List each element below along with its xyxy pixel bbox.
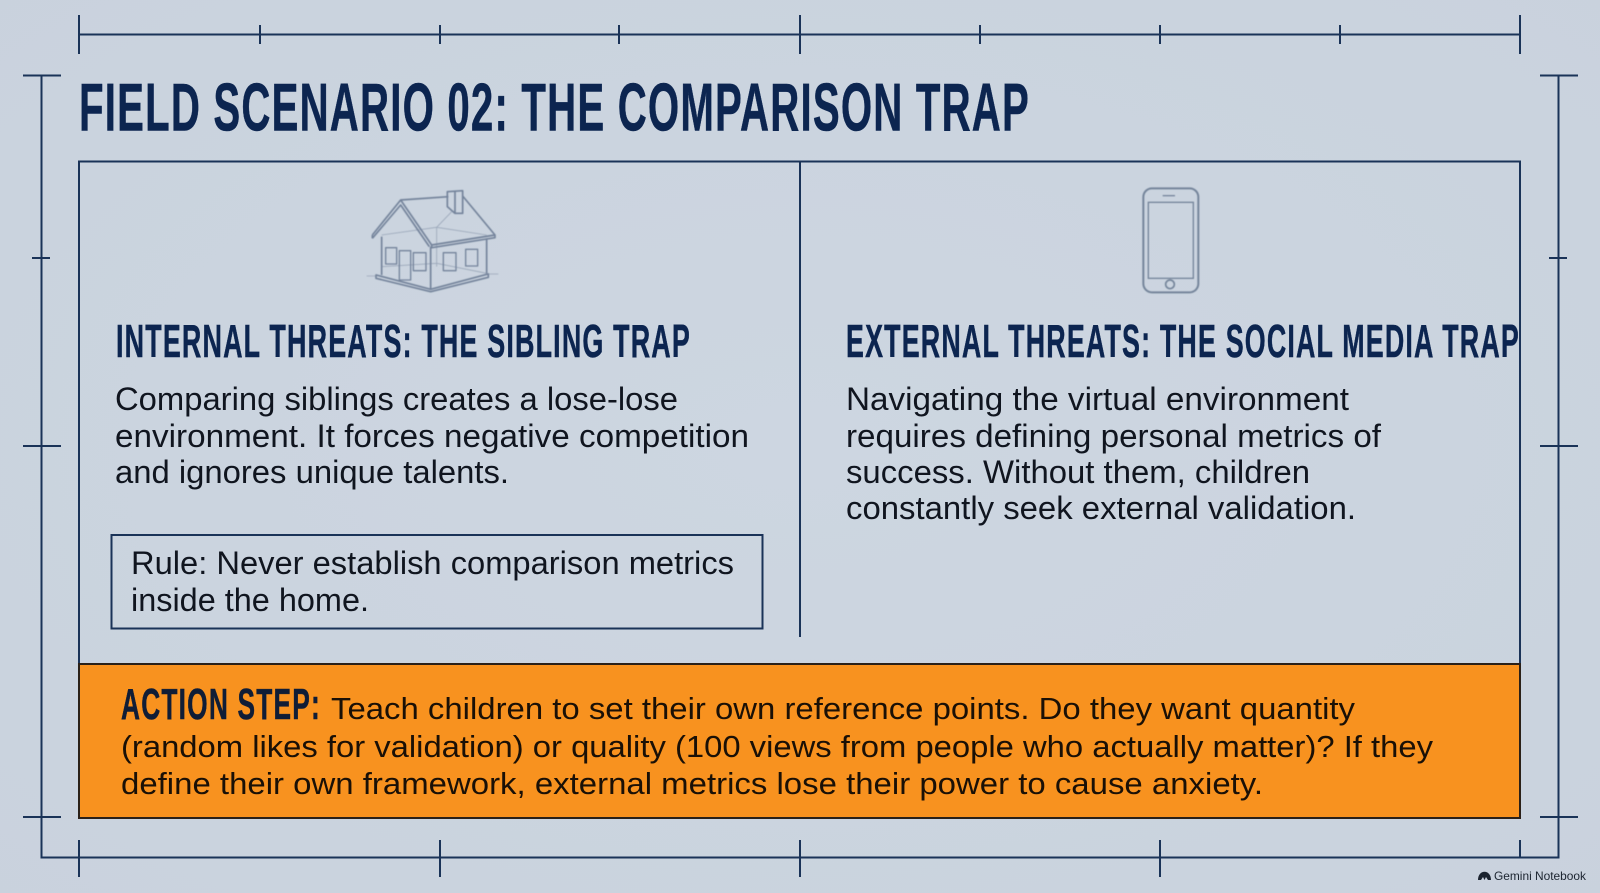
text: virtual environment: Navigating the virtual environment xyxy=(846,381,1349,417)
panel: external threats xyxy=(846,188,1520,526)
heading: internal threats: INTERNAL THREATS: THE SIBLING TRAP xyxy=(116,315,691,367)
panel: action step xyxy=(79,664,1520,818)
text: virtual environment: success. Without them, children xyxy=(846,454,1310,490)
text: action step body: define their own framework, external metrics lose their power to cause anxiety. xyxy=(121,766,1263,801)
callout: rule: inside the home. xyxy=(131,582,369,618)
panel divider xyxy=(799,161,801,637)
top ruler xyxy=(79,15,1520,54)
main panel outline xyxy=(79,162,1520,664)
text: action step body xyxy=(121,691,1434,801)
text: action step body: Teach children to set their own reference points. Do they want quantity xyxy=(331,691,1356,726)
heading: action step: ACTION STEP: xyxy=(121,680,321,729)
text: sibling comparison: environment. It forces negative competition xyxy=(115,418,749,454)
text: virtual environment: requires defining personal metrics of xyxy=(846,418,1381,454)
text: sibling comparison xyxy=(115,381,749,490)
text: sibling comparison: Comparing siblings creates a lose-lose xyxy=(115,381,678,417)
callout: rule: Rule: Never establish comparison metrics xyxy=(131,545,734,581)
text: virtual environment xyxy=(846,381,1381,526)
callout: rule xyxy=(112,535,762,628)
icon: smartphone xyxy=(1143,188,1198,292)
panel: internal threats xyxy=(112,191,762,628)
text: action step body: (random likes for validation) or quality (100 views from people who actually matter)? If they xyxy=(121,729,1434,764)
icon: house xyxy=(367,191,498,292)
text: virtual environment: constantly seek external validation. xyxy=(846,490,1356,526)
watermark: Gemini Notebook: Gemini Notebook xyxy=(1494,869,1587,883)
text: sibling comparison: and ignores unique talents. xyxy=(115,454,509,490)
